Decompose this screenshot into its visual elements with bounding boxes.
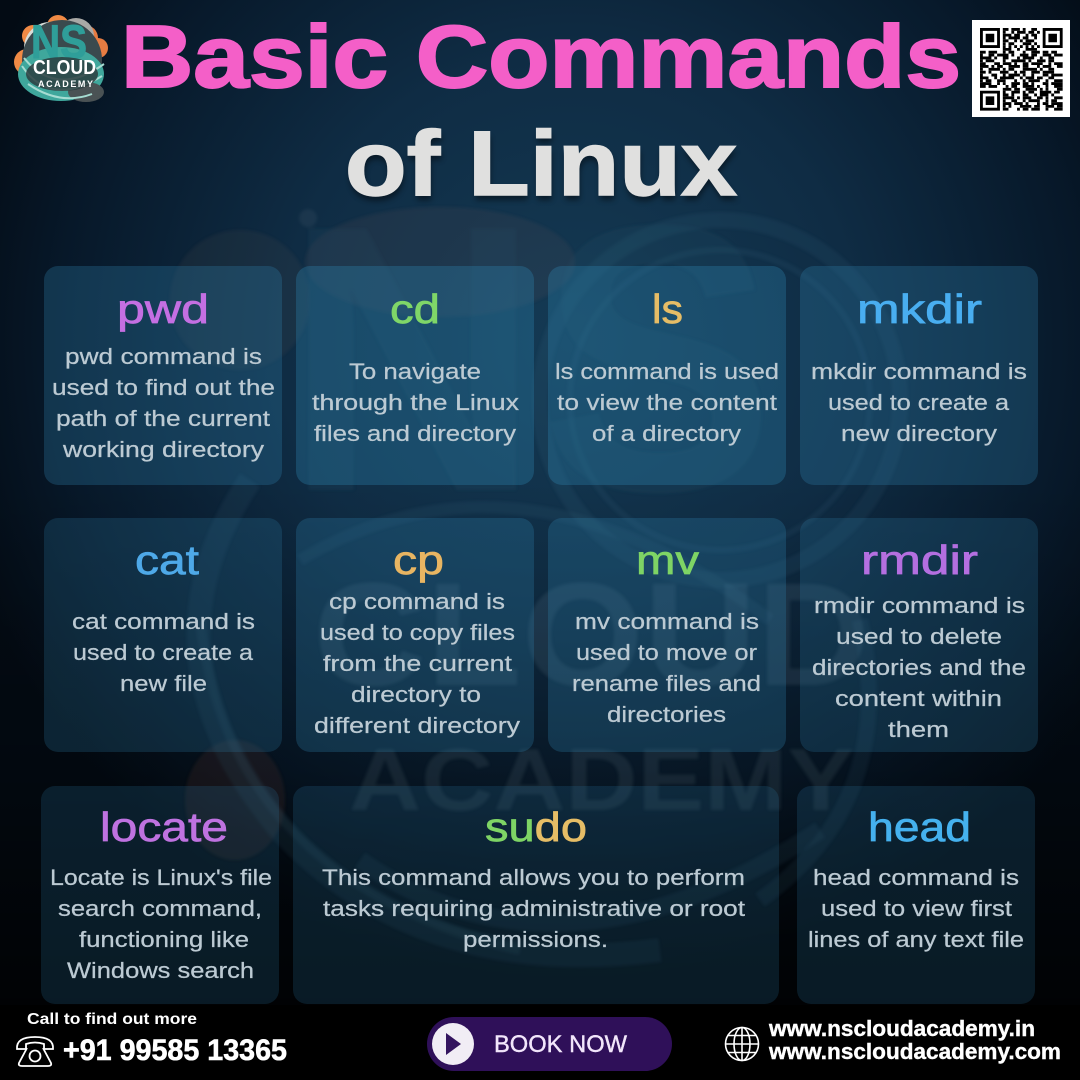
heading: mkdir: mkdir (857, 286, 982, 332)
text: mv description: directories (607, 702, 726, 727)
text: mkdir description: mkdir command is (811, 359, 1027, 384)
text: cp description: directory to (351, 682, 481, 707)
panel: locate (41, 786, 279, 1004)
button label: BOOK NOW (494, 1031, 627, 1058)
text: mkdir description: new directory (841, 421, 997, 446)
text: cat description (72, 609, 255, 696)
heading: cp: cp (393, 537, 444, 583)
text: sudo description (322, 865, 745, 952)
panel: cp (296, 518, 534, 752)
text: sudo description: tasks requiring administrative or root (323, 896, 745, 921)
text: cat description: cat command is (72, 609, 255, 634)
text: rmdir description: rmdir command is (814, 593, 1025, 618)
icon: play (432, 1023, 474, 1065)
text: cat description: used to create a (73, 640, 254, 665)
QR code (972, 20, 1070, 117)
footer text: website in: www.nscloudacademy.in (768, 1016, 1035, 1041)
footer text: phone number: +91 99585 13365 (63, 1034, 287, 1067)
text: locate description: Locate is Linux's file (50, 865, 272, 890)
heading: locate: locate (100, 804, 228, 850)
text: sudo description: permissions. (463, 927, 608, 952)
text: mv description (572, 609, 761, 727)
text: locate description (50, 865, 272, 983)
text: mv description: rename files and (572, 671, 761, 696)
footer text: call to find out more: Call to find out more (27, 1011, 197, 1028)
panel: mkdir (800, 266, 1038, 485)
panel: cat (44, 518, 282, 752)
panel: pwd (44, 266, 282, 485)
text: mv description: mv command is (575, 609, 759, 634)
text: cd description: files and directory (314, 421, 516, 446)
text: cp description (314, 589, 520, 738)
logo word ACADEMY: ACADEMY (38, 79, 93, 89)
text: pwd description (52, 344, 275, 462)
icon: telephone (17, 1037, 53, 1066)
heading: cd: cd (390, 286, 440, 332)
text: cat description: new file (120, 671, 207, 696)
logo: NS Cloud Academy (14, 15, 108, 102)
watermark logo: CLOUD (313, 553, 870, 717)
text: pwd description: path of the current (56, 406, 270, 431)
heading: pwd: pwd (117, 286, 209, 332)
panel: mv (548, 518, 786, 752)
text: head description (808, 865, 1024, 952)
logo word CLOUD: CLOUD (33, 57, 96, 79)
text: mv description: used to move or (576, 640, 757, 665)
text: rmdir description: them (888, 717, 949, 742)
watermark logo: NS (285, 146, 775, 571)
text: cd description: To navigate (349, 359, 481, 384)
logo letters NS: NS (31, 15, 87, 68)
text: ls description (555, 359, 779, 446)
panel: rmdir (800, 518, 1038, 752)
text: cp description: different directory (314, 713, 520, 738)
title: of Linux: of Linux (345, 113, 737, 215)
panel: cd (296, 266, 534, 485)
title: of Linux: of Linux (346, 118, 738, 220)
text: pwd description: working directory (62, 437, 264, 462)
text: cp description: from the current (323, 651, 512, 676)
text: ls description: ls command is used (555, 359, 779, 384)
text: head description: used to view first (821, 896, 1012, 921)
heading: cat: cat (135, 537, 200, 583)
text: rmdir description: content within (835, 686, 1002, 711)
text: head description: head command is (813, 865, 1019, 890)
text: locate description: Windows search (67, 958, 254, 983)
watermark logo (170, 146, 900, 955)
text: sudo description: This command allows you to perform (322, 865, 745, 890)
text: head description: lines of any text file (808, 927, 1024, 952)
panel: head (797, 786, 1035, 1004)
text: cp description: cp command is (329, 589, 505, 614)
text: cd description (312, 359, 519, 446)
icon: globe (726, 1028, 758, 1060)
watermark logo: ACADEMY (349, 730, 854, 829)
text: cp description: used to copy files (320, 620, 515, 645)
text: rmdir description: directories and the (812, 655, 1026, 680)
text: locate description: search command, (58, 896, 262, 921)
heading: head: head (868, 804, 971, 850)
text: locate description: functioning like (79, 927, 249, 952)
text: pwd description: used to find out the (52, 375, 275, 400)
text: cd description: through the Linux (312, 390, 519, 415)
heading: sudo: sudo (485, 804, 587, 850)
text: pwd description: pwd command is (65, 344, 262, 369)
text: ls description: to view the content (557, 390, 777, 415)
button: book now (427, 1017, 672, 1071)
text: ls description: of a directory (592, 421, 741, 446)
text: mkdir description: used to create a (828, 390, 1010, 415)
heading: mv: mv (636, 537, 700, 583)
logo band (26, 57, 98, 91)
panel: ls (548, 266, 786, 485)
text: rmdir description: used to delete (836, 624, 1002, 649)
heading: rmdir: rmdir (861, 537, 978, 583)
panel: sudo (293, 786, 779, 1004)
footer text: website com: www.nscloudacademy.com (768, 1039, 1061, 1064)
text: mkdir description (811, 359, 1027, 446)
text: rmdir description (812, 593, 1026, 742)
heading: ls: ls (652, 286, 683, 332)
title: Basic Commands: Basic Commands (121, 7, 961, 106)
